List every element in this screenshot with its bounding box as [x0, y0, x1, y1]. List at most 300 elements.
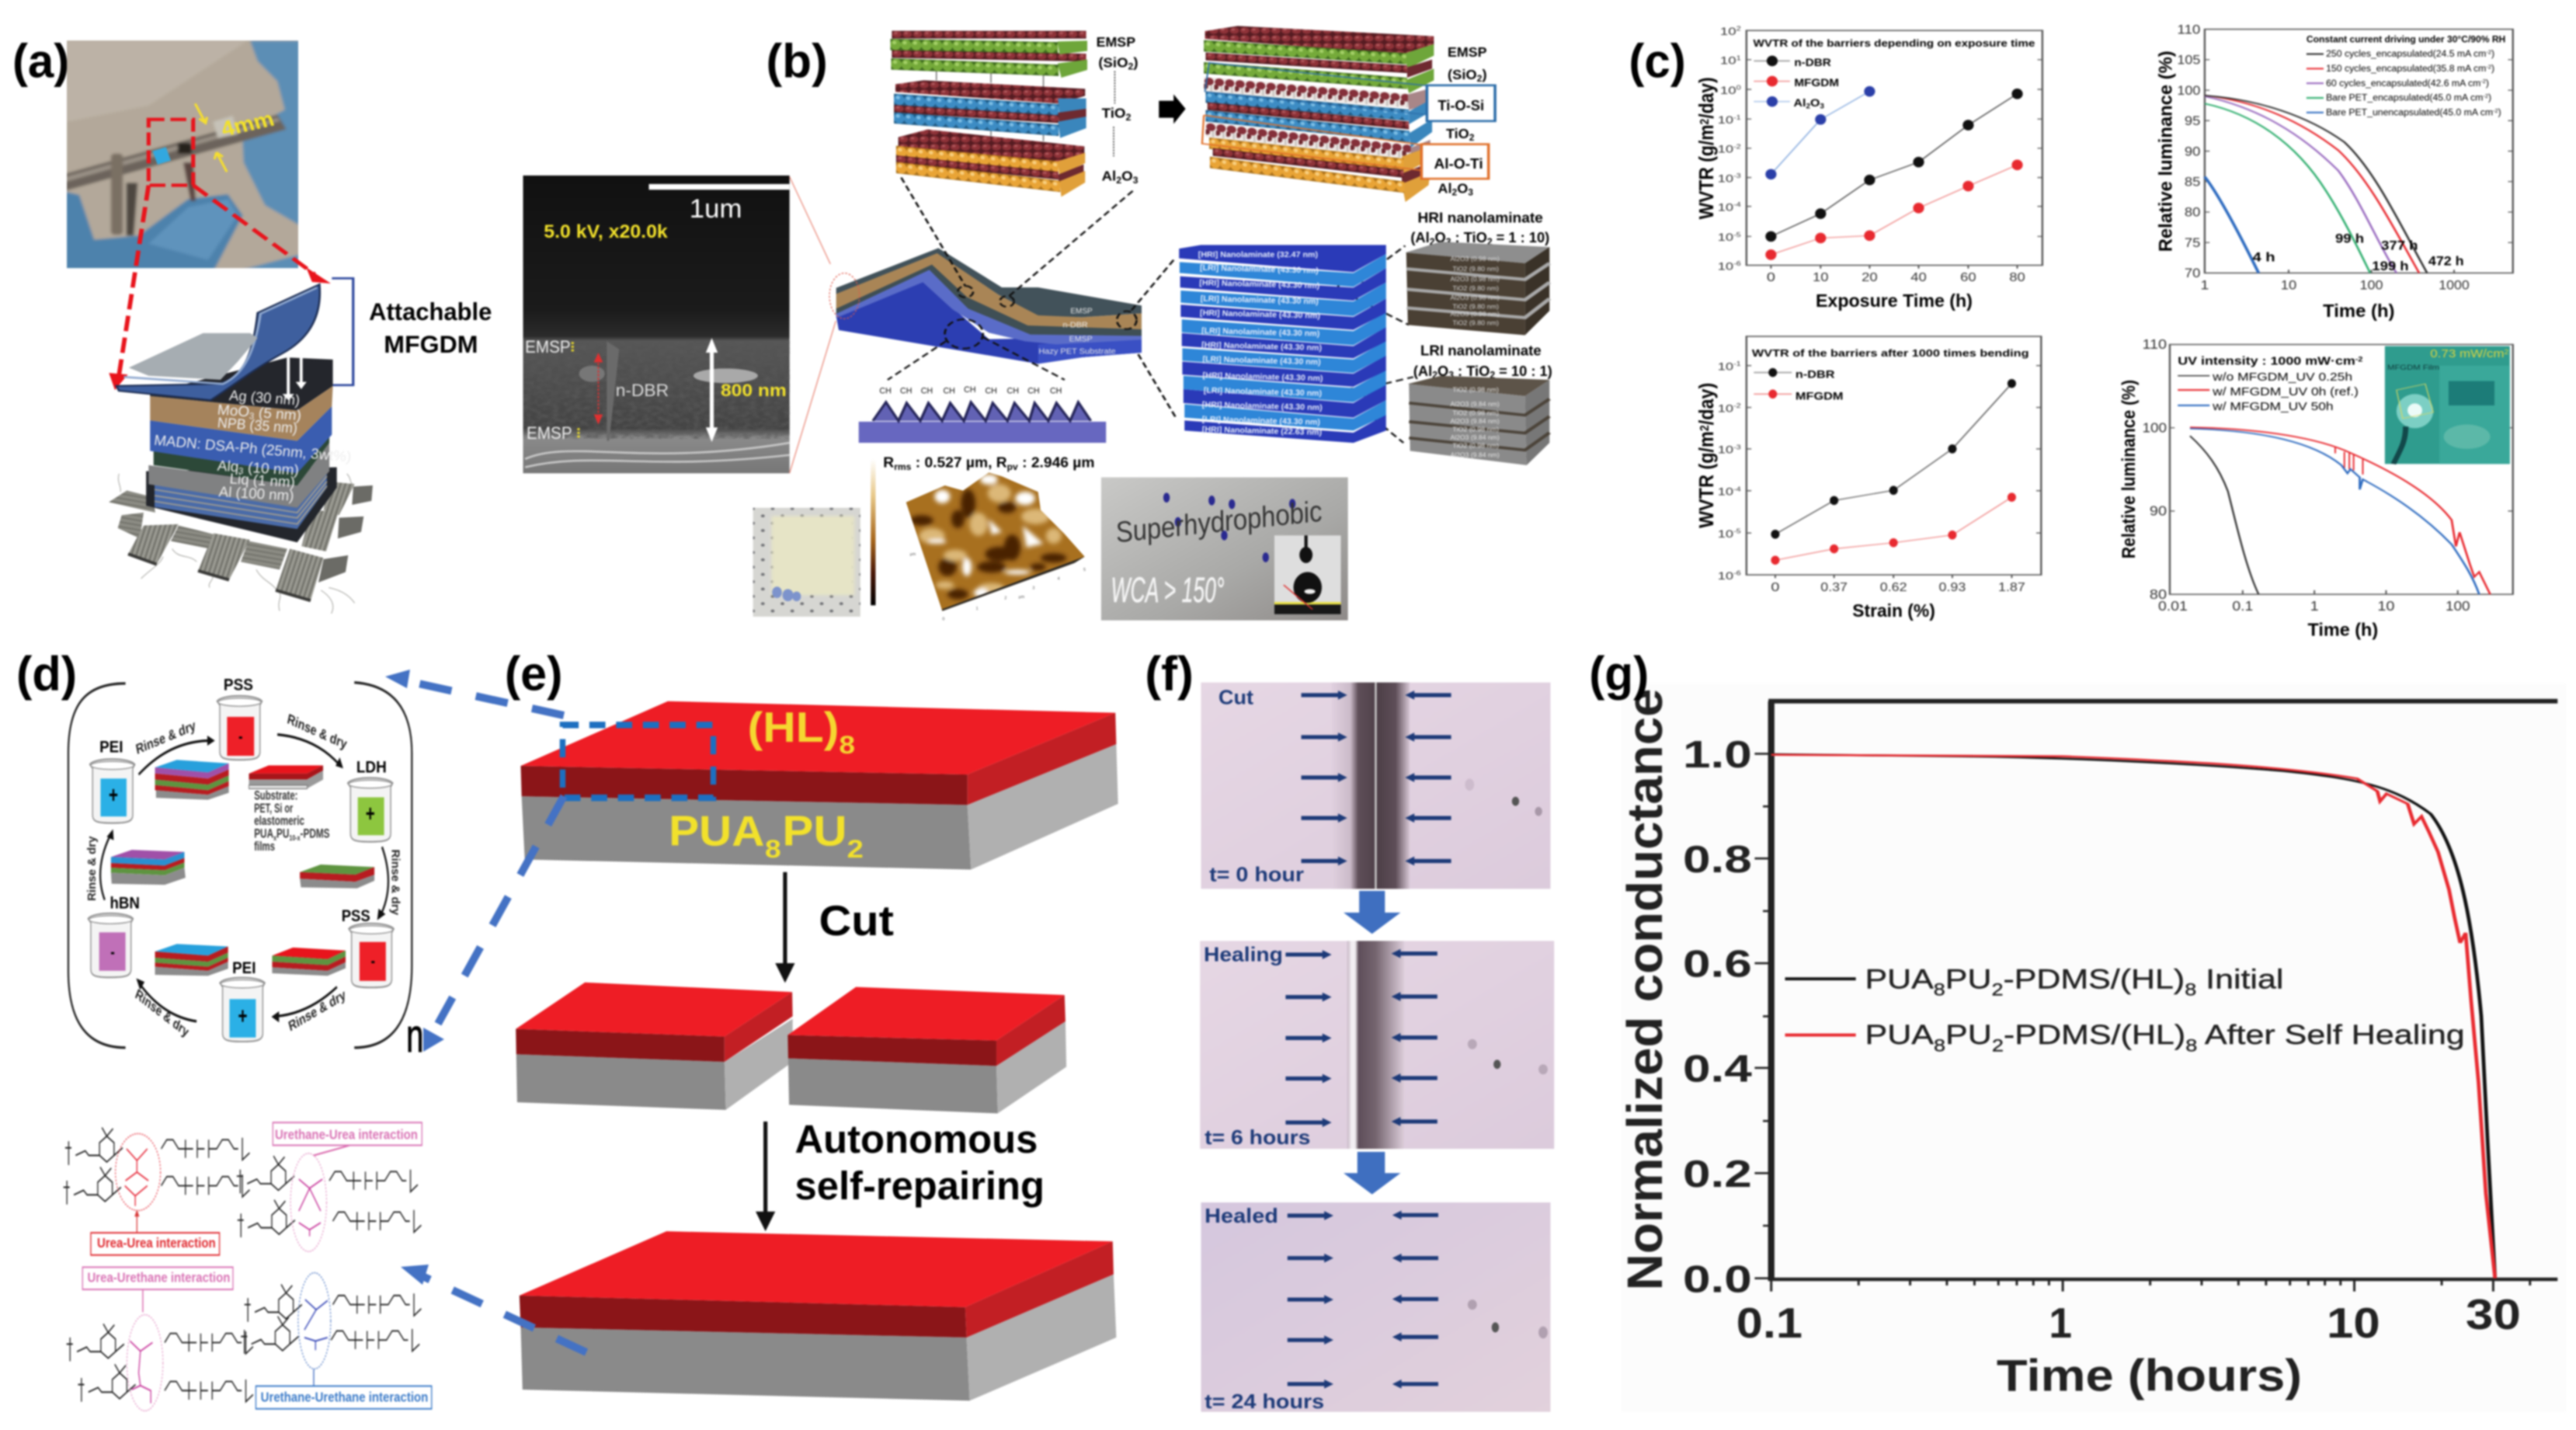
chart: relative luminance under driving: -2	[2483, 93, 2488, 99]
red dashed arrow to film edge	[109, 185, 148, 390]
urea-urea interaction	[91, 1133, 220, 1255]
panel label b: (b)	[766, 34, 828, 88]
left layer names: )	[1133, 56, 1139, 71]
panel d	[16, 646, 432, 1411]
panel label e: (e)	[505, 647, 562, 701]
left layer names: 2	[1116, 176, 1122, 185]
n-DBR nanolaminate stack: [LRI] Nanolaminate (43.30 nm)	[1202, 354, 1321, 367]
HRI nanolaminate heading: (Al	[1410, 229, 1437, 245]
chart: relative luminance under driving: )	[2491, 64, 2494, 74]
chart: WVTR vs strain: -2	[1733, 402, 1741, 409]
LRI nanolaminate heading: O	[1437, 363, 1448, 379]
cycle brackets	[68, 683, 412, 1048]
cut film right piece	[787, 987, 1066, 1113]
HRI nanolaminate block: Al2O3 (0.98 nm)	[1451, 294, 1500, 301]
chart: WVTR vs exposure time: MFGDM	[1794, 76, 1839, 89]
right layer names: )	[1482, 68, 1487, 82]
stack layer names: Liq (1 nm)	[229, 471, 296, 491]
wavy barrier cross-section	[829, 248, 1142, 364]
chart: WVTR vs exposure time: 10	[1813, 271, 1829, 284]
chart: WVTR vs exposure time: 3	[1820, 103, 1824, 110]
chart: normalized conductance over time: PUA	[1865, 964, 1967, 994]
chart: relative luminance under UV: 0.01	[2158, 598, 2188, 614]
right layer names: 2	[1469, 133, 1475, 142]
autonomous self-repairing label: Autonomous	[795, 1119, 1038, 1162]
left layer names: O	[1121, 169, 1133, 184]
initial coated film: 8	[765, 834, 781, 863]
chart: WVTR vs exposure time: -5	[1733, 231, 1741, 238]
chart: relative luminance under driving: )	[2488, 93, 2491, 103]
right molecular layers after bonding	[1202, 26, 1437, 202]
blue down arrow 1	[1344, 891, 1400, 934]
chart: WVTR vs exposure time: 80	[2009, 271, 2025, 284]
micrograph: healing at 6 hours	[1200, 941, 1554, 1149]
rinse and dry labels: Rinse & dry	[287, 987, 348, 1035]
micrograph: healing at 6 hours: Healing	[1204, 943, 1283, 966]
after self healing curve	[1771, 755, 2495, 1279]
HRI nanolaminate heading: HRI nanolaminate	[1417, 210, 1543, 226]
chart: relative luminance under UV: UV intensity : 1000 mW·cm	[2178, 354, 2397, 367]
SEM cross-section image	[523, 176, 790, 473]
roughness label: : 2.946 µm	[1018, 454, 1094, 471]
red lines from SEM to cross-section	[790, 177, 836, 473]
beakers with solutions: PEI	[99, 737, 123, 756]
chart: normalized conductance over time: 8	[2185, 980, 2196, 999]
y ticks: 0.4	[1683, 1047, 1752, 1090]
left layer names: 3	[1133, 176, 1139, 185]
right layer names: 2	[1452, 187, 1458, 197]
stack layer names: NPB (35 nm)	[217, 415, 298, 437]
chart: WVTR vs exposure time: WVTR of the barriers depending on exposure time	[1754, 37, 2035, 49]
SEM cross-section image: EMSP	[525, 338, 571, 357]
stack layer names: MADN: DSA-Ph (25nm, 3wt%)	[153, 433, 352, 465]
beakers with solutions: PEI	[232, 958, 256, 977]
chart: WVTR vs strain: 2	[1698, 425, 1711, 431]
x ticks: 0.1	[1736, 1300, 1803, 1347]
chart: WVTR vs exposure time: Al	[1794, 97, 1810, 109]
chart: WVTR vs strain: 10	[1718, 569, 1736, 582]
beakers with solutions: +	[238, 1004, 247, 1029]
AFM surface topography: 0	[942, 617, 944, 621]
LRI nanolaminate block: Al2O3 (9.84 nm)	[1451, 452, 1500, 458]
beakers with solutions: +	[366, 802, 375, 827]
hydrogen bond chemical structures	[64, 1122, 432, 1411]
SEM cross-section image: 800 nm	[721, 381, 787, 400]
chart: relative luminance under driving: )	[2486, 78, 2489, 89]
chart: relative luminance under driving: 70	[2185, 266, 2200, 280]
chart: WVTR vs exposure time: 20	[1862, 271, 1878, 284]
substrate stack with caption: 10-x	[289, 833, 301, 842]
chart: normalized conductance over time: PU	[1945, 964, 1991, 994]
chart: relative luminance under UV: w/ MFGDM_UV 50h	[2212, 400, 2334, 413]
molecular layers before and after bonding	[891, 26, 1437, 202]
chart: WVTR vs exposure time: 10	[1718, 172, 1736, 184]
right layer names: 3	[1468, 187, 1473, 197]
substrate stack with caption: Substrate:	[254, 788, 297, 802]
panel b	[753, 26, 1552, 621]
LRI nanolaminate block: TiO2 (0.98 nm)	[1452, 410, 1499, 416]
chart: relative luminance under driving: 472 h	[2428, 254, 2464, 268]
y axis title: Normalized conductance	[1617, 688, 1672, 1290]
initial coated film: 8	[839, 730, 855, 759]
stack layer names: Al (100 nm)	[218, 484, 294, 504]
blue down arrow 2	[1344, 1152, 1400, 1195]
chart: normalized conductance over time: 8	[2185, 1036, 2197, 1055]
n-DBR nanolaminate stack: [LRI] Nanolaminate (43.30 nm)	[1200, 263, 1319, 275]
n-DBR nanolaminate stack: [HRI] Nanolaminate (32.47 nm)	[1198, 250, 1318, 259]
legend	[1785, 976, 1856, 981]
chart: WVTR vs exposure time: 1	[1736, 54, 1741, 62]
y ticks: 1.0	[1683, 733, 1752, 776]
photo: device on rod held with gloved hands: 4mm	[218, 108, 277, 141]
chart: WVTR vs strain	[1695, 336, 2041, 621]
AFM surface topography: 2	[1004, 597, 1006, 601]
chart: WVTR vs exposure time: 10	[1720, 84, 1739, 96]
AFM surface topography: µm	[1019, 595, 1025, 600]
superhydrophobic photo: Superhydrophobic	[1113, 496, 1325, 549]
HRI nanolaminate heading: = 1 : 10)	[1493, 229, 1549, 245]
LRI nanolaminate block: TiO2 (0.98 nm)	[1452, 426, 1499, 433]
bracket	[332, 278, 353, 385]
chart: relative luminance under UV: 80	[2150, 586, 2167, 602]
panel label c: (c)	[1629, 34, 1686, 88]
chart: relative luminance under UV	[2119, 337, 2513, 640]
repair arrow	[756, 1122, 775, 1231]
layer-by-layer cycle diagram	[68, 675, 424, 1062]
chart: WVTR vs strain: 0.62	[1880, 581, 1907, 594]
substrate stack with caption: films	[254, 839, 275, 853]
chart: WVTR vs exposure time: 10	[1718, 113, 1736, 126]
chart: relative luminance under driving	[2155, 23, 2513, 321]
chart: WVTR vs exposure time: /day)	[1695, 77, 1718, 119]
chart: WVTR vs exposure time: 60	[1960, 271, 1976, 284]
chart: relative luminance under UV: Relative luminance (%)	[2119, 380, 2140, 558]
chart: relative luminance under driving: Bare PET_unencapsulated(45.0 mA cm	[2326, 107, 2573, 118]
Ti-O-Si bond box	[1427, 85, 1495, 121]
HRI nanolaminate block	[1405, 242, 1549, 335]
HRI nanolaminate block: TiO2 (9.80 nm)	[1452, 304, 1499, 310]
substrate stack with caption: x	[273, 833, 276, 842]
chart: normalized conductance over time	[1617, 684, 2566, 1412]
textured hazy substrate: CH	[964, 384, 976, 395]
UV inset photo: MFGDM Film	[2387, 363, 2439, 371]
attachable MFGDM label	[369, 298, 492, 358]
chart: relative luminance under UV: Time (h)	[2307, 620, 2378, 640]
micrograph: healed at 24 hours: Healed	[1205, 1205, 1278, 1227]
beakers with solutions: LDH	[356, 757, 387, 776]
stack layer names: MoO	[217, 402, 257, 420]
AFM surface topography: µm	[910, 552, 916, 557]
chart: WVTR vs exposure time	[1695, 25, 2042, 311]
chart: WVTR vs exposure time: 10	[1718, 231, 1736, 243]
urethane-urethane interaction	[256, 1273, 432, 1409]
chart: relative luminance under driving: Relative luminance (%)	[2155, 50, 2176, 252]
AFM surface topography: 1	[976, 607, 979, 611]
cut arrow	[775, 872, 795, 983]
chart: relative luminance under UV: 90	[2150, 503, 2167, 519]
LRI nanolaminate block: Al2O3 (9.84 nm)	[1451, 418, 1500, 425]
textured hazy substrate: CH	[1027, 385, 1040, 395]
fabric substrate	[109, 474, 373, 614]
micrograph: healing at 6 hours: t= 6 hours	[1205, 1126, 1310, 1149]
left layer names: Al	[1102, 169, 1120, 184]
wavy barrier cross-section: EMSP	[1069, 335, 1093, 343]
chart: normalized conductance over time: 2	[1991, 980, 2004, 999]
chart: relative luminance under UV: 0.1	[2232, 598, 2253, 614]
right layer names: EMSP	[1448, 46, 1487, 60]
attachable MFGDM label: MFGDM	[384, 331, 478, 358]
blue dashed arrow to assembly cycle	[385, 670, 564, 715]
AFM surface topography: 3	[1032, 586, 1034, 590]
chart: WVTR vs exposure time: O	[1810, 97, 1820, 109]
chart: relative luminance under driving: )	[2498, 107, 2501, 118]
right layer names: O	[1457, 182, 1468, 197]
rinse and dry labels: Rinse & dry	[85, 837, 98, 901]
n-DBR nanolaminate stack	[1179, 245, 1386, 443]
left layer names: (SiO	[1098, 56, 1135, 71]
y ticks: 0.8	[1683, 838, 1752, 881]
rinse arrows	[100, 735, 388, 1022]
rinse and dry labels: Rinse & dry	[134, 986, 190, 1041]
chart: WVTR vs exposure time: 2	[1736, 26, 1741, 33]
x axis title: Time (hours)	[1997, 1351, 2302, 1400]
chart: WVTR vs exposure time: 40	[1910, 271, 1927, 284]
chart: relative luminance under driving: 80	[2185, 205, 2200, 220]
y ticks	[1683, 733, 1752, 1300]
n-DBR nanolaminate stack: [HRI] Nanolaminate (22.63 nm)	[1202, 425, 1322, 437]
chart: WVTR vs strain: 10	[1718, 402, 1736, 414]
chart: relative luminance under UV: 100	[2142, 420, 2167, 435]
initial curve	[1771, 754, 2495, 1279]
chart: relative luminance under UV: 10	[2377, 598, 2394, 614]
SEM cross-section image: 5.0 kV, x20.0k	[544, 221, 668, 242]
superhydrophobic photo	[1101, 478, 1348, 621]
beakers with solutions: +	[109, 783, 118, 809]
chart: WVTR vs strain: -4	[1733, 485, 1741, 493]
urea-urethane interaction: Urea-Urethane interaction	[87, 1270, 230, 1286]
HRI nanolaminate heading: 3	[1446, 237, 1451, 248]
urea-urea interaction: Urea-Urea interaction	[97, 1236, 216, 1251]
chart: WVTR vs strain: -5	[1733, 528, 1741, 535]
panel label d: (d)	[16, 646, 77, 701]
LRI nanolaminate heading: LRI nanolaminate	[1420, 343, 1542, 359]
chart: normalized conductance over time: -PDMS/(HL)	[2004, 1019, 2185, 1050]
Al-O-Ti bond box: Al-O-Ti	[1434, 155, 1483, 172]
stack layer names: 3	[238, 465, 244, 476]
chart: WVTR vs strain: /day)	[1695, 383, 1718, 425]
HRI nanolaminate heading: : TiO	[1451, 229, 1487, 245]
chart: WVTR vs exposure time: 2	[1698, 119, 1711, 124]
right layer names: 2	[1477, 74, 1483, 84]
initial coated film: (HL)	[748, 703, 839, 750]
chart: relative luminance under driving: 90	[2185, 144, 2200, 158]
chart: normalized conductance over time: PU	[1945, 1019, 1992, 1050]
n-DBR nanolaminate stack: [LRI] Nanolaminate (43.30 nm)	[1202, 415, 1320, 426]
dashed zoom callouts	[888, 178, 1413, 443]
OLED layer stack	[146, 357, 352, 542]
left molecular layers before bonding	[891, 31, 1087, 197]
chart: WVTR vs exposure time: -6	[1733, 260, 1741, 267]
blue dashed arrow to chemical structures	[401, 1265, 586, 1352]
initial coated film: 2	[847, 834, 864, 863]
stack layer names: Alq	[217, 458, 244, 475]
chart: normalized conductance over time: 2	[1992, 1036, 2004, 1055]
textured hazy substrate	[859, 384, 1106, 443]
chart: WVTR vs strain: n-DBR	[1796, 368, 1834, 381]
HRI nanolaminate block: TiO2 (9.80 nm)	[1452, 320, 1499, 326]
polymer chains	[64, 1128, 421, 1402]
HRI nanolaminate block: Al2O3 (0.98 nm)	[1451, 256, 1500, 262]
textured hazy substrate: CH	[1007, 385, 1019, 395]
substrate stack with caption: PU	[276, 826, 289, 840]
left layer names: 2	[1126, 113, 1132, 122]
LRI nanolaminate block: TiO2 (0.98 nm)	[1452, 443, 1499, 449]
left layer names: TiO	[1102, 106, 1132, 121]
micrograph: cut at 0 hours	[1201, 683, 1550, 889]
rinse and dry labels: Rinse & dry	[286, 712, 348, 753]
roughness label: pv	[1007, 462, 1018, 472]
n-DBR nanolaminate stack: [HRI] Nanolaminate (43.30 nm)	[1201, 340, 1322, 353]
SEM cross-section image: 1um	[690, 193, 742, 224]
y ticks: 0.2	[1683, 1153, 1752, 1195]
chart: WVTR vs exposure time: -4	[1733, 201, 1741, 209]
chart: WVTR vs strain: WVTR (g/m	[1695, 457, 1718, 528]
textured hazy substrate: CH	[943, 385, 955, 395]
left layer names	[1097, 36, 1139, 185]
wavy barrier cross-section: EMSP	[1070, 307, 1093, 315]
chart: WVTR vs exposure time: 10	[1718, 143, 1736, 155]
LRI nanolaminate heading: 2	[1490, 371, 1495, 381]
right layer names: TiO	[1446, 127, 1476, 141]
substrate stack with caption: elastomeric	[254, 813, 304, 828]
substrate stack with caption: PUA	[254, 826, 273, 840]
chart: relative luminance under driving: 100	[2177, 83, 2200, 98]
LRI nanolaminate block: TiO2 (0.98 nm)	[1452, 387, 1499, 393]
AFM surface topography	[901, 468, 1090, 621]
autonomous self-repairing label: self-repairing	[795, 1165, 1045, 1209]
LRI nanolaminate heading: 3	[1448, 371, 1454, 381]
beakers with solutions: PSS	[224, 675, 253, 694]
x ticks	[1736, 1291, 2521, 1347]
HRI nanolaminate heading: 2	[1487, 237, 1493, 248]
chart: relative luminance under driving: 10	[2281, 278, 2296, 292]
panel c	[1629, 23, 2513, 640]
attachable MFGDM label: Attachable	[369, 298, 492, 325]
chart: relative luminance under driving: -2	[2486, 49, 2491, 55]
micrograph: healed at 24 hours	[1201, 1202, 1550, 1413]
initial coated film: PUA	[669, 806, 764, 854]
chart: relative luminance under driving: 75	[2185, 235, 2200, 250]
UV inset photo	[2385, 346, 2510, 464]
peeled attachable film	[116, 284, 320, 400]
beakers with solutions: -	[110, 942, 115, 962]
red dashed arrow to film corner	[193, 185, 331, 284]
chart: relative luminance under driving: )	[2491, 49, 2494, 59]
Al-O-Ti bond box	[1421, 144, 1489, 179]
AFM surface topography: 5	[1083, 568, 1086, 572]
arrow between stacks	[1159, 94, 1186, 124]
chart: relative luminance under driving: 99 h	[2335, 232, 2364, 246]
HRI nanolaminate heading: O	[1434, 229, 1446, 245]
x ticks: 1	[2049, 1300, 2072, 1347]
n-DBR nanolaminate stack: [HRI] Nanolaminate (43.30 nm)	[1199, 278, 1320, 291]
n-DBR nanolaminate stack: [HRI] Nanolaminate (43.30 nm)	[1202, 400, 1323, 412]
chart: WVTR vs strain: MFGDM	[1796, 390, 1843, 402]
HRI nanolaminate block: Al2O3 (0.98 nm)	[1451, 311, 1500, 318]
chart: relative luminance under driving: 4 h	[2252, 250, 2275, 264]
stack layer names	[153, 388, 352, 504]
chart: relative luminance under driving: Bare PET_encapsulated(45.0 mA cm	[2326, 93, 2557, 103]
sample photo on dotted paper	[753, 508, 860, 617]
HRI nanolaminate heading: 2	[1430, 237, 1434, 248]
LRI nanolaminate heading: 2	[1432, 371, 1437, 381]
chart: WVTR vs strain: 10	[1718, 444, 1736, 456]
chart: relative luminance under UV: -2	[2355, 356, 2362, 364]
chart: WVTR vs strain: 0.37	[1820, 581, 1848, 594]
chart: relative luminance under driving: 1	[2200, 278, 2209, 292]
panel a and SEM image	[12, 35, 790, 614]
x ticks: 30	[2466, 1291, 2521, 1338]
panel label f: (f)	[1145, 647, 1194, 701]
right layer names: (SiO	[1448, 68, 1485, 82]
chart: WVTR vs strain: -3	[1733, 444, 1741, 451]
left layer names: EMSP	[1097, 36, 1135, 50]
beakers with solutions: -	[371, 952, 375, 971]
cut film left piece	[516, 983, 793, 1110]
chart: WVTR vs exposure time: -3	[1733, 172, 1741, 179]
chart: WVTR vs strain: Strain (%)	[1852, 601, 1935, 621]
chart: WVTR vs strain: WVTR of the barriers after 1000 times bending	[1752, 347, 2029, 359]
chart: WVTR vs exposure time: n-DBR	[1794, 57, 1831, 68]
chart: WVTR vs exposure time: 0	[1736, 85, 1741, 92]
micrograph: healed at 24 hours: t= 24 hours	[1205, 1390, 1324, 1413]
blue dashed selection box	[562, 725, 713, 798]
urea-urethane interaction	[82, 1267, 233, 1411]
n-DBR nanolaminate stack: [HRI] Nanolaminate (43.30 nm)	[1200, 308, 1320, 320]
chart: relative luminance under driving: 60 cycles_encapsulated(42.6 mA cm	[2326, 78, 2555, 89]
LRI nanolaminate heading: = 10 : 1)	[1495, 363, 1552, 379]
beakers with solutions: -	[238, 727, 242, 746]
n-DBR nanolaminate stack: [LRI] Nanolaminate (43.30 nm)	[1204, 385, 1322, 398]
textured hazy substrate: CH	[900, 385, 912, 395]
chart: WVTR vs strain: -6	[1733, 570, 1741, 577]
AFM colour scale bar	[871, 459, 875, 605]
chart: relative luminance under driving: -2	[2480, 78, 2486, 85]
LRI nanolaminate block: Al2O3 (9.84 nm)	[1451, 401, 1500, 408]
y ticks: 0.0	[1683, 1258, 1752, 1300]
chart: WVTR vs exposure time: 10	[1720, 25, 1739, 37]
chart: normalized conductance over time: -PDMS/(HL)	[2004, 964, 2185, 994]
rinse and dry labels	[85, 712, 402, 1041]
textured hazy substrate: CH	[879, 385, 892, 395]
chart: WVTR vs exposure time: 10	[1718, 201, 1736, 214]
chart: relative luminance under UV: w/o MFGDM_UV 0.25h	[2212, 371, 2352, 384]
wavy barrier cross-section: Hazy PET Substrate	[1038, 348, 1116, 357]
rinse and dry labels: Rinse & dry	[134, 718, 197, 758]
right layer names: Al	[1437, 182, 1456, 197]
autonomous self-repairing label	[795, 1119, 1045, 1209]
SEM cross-section image: n-DBR	[616, 381, 669, 400]
n-DBR nanolaminate stack: [LRI] Nanolaminate (43.30 nm)	[1200, 294, 1319, 306]
HRI nanolaminate block: TiO2 (9.80 nm)	[1452, 285, 1499, 292]
chart: relative luminance under UV: 1	[2310, 598, 2319, 614]
chart: WVTR vs strain: 10	[1718, 485, 1736, 498]
chart: WVTR vs strain: 0	[1771, 581, 1779, 594]
x ticks: 10	[2327, 1300, 2380, 1347]
chart: relative luminance under driving: 110	[2177, 23, 2200, 37]
panel e	[505, 647, 1118, 1400]
wavy barrier cross-section: n-DBR	[1062, 322, 1088, 330]
